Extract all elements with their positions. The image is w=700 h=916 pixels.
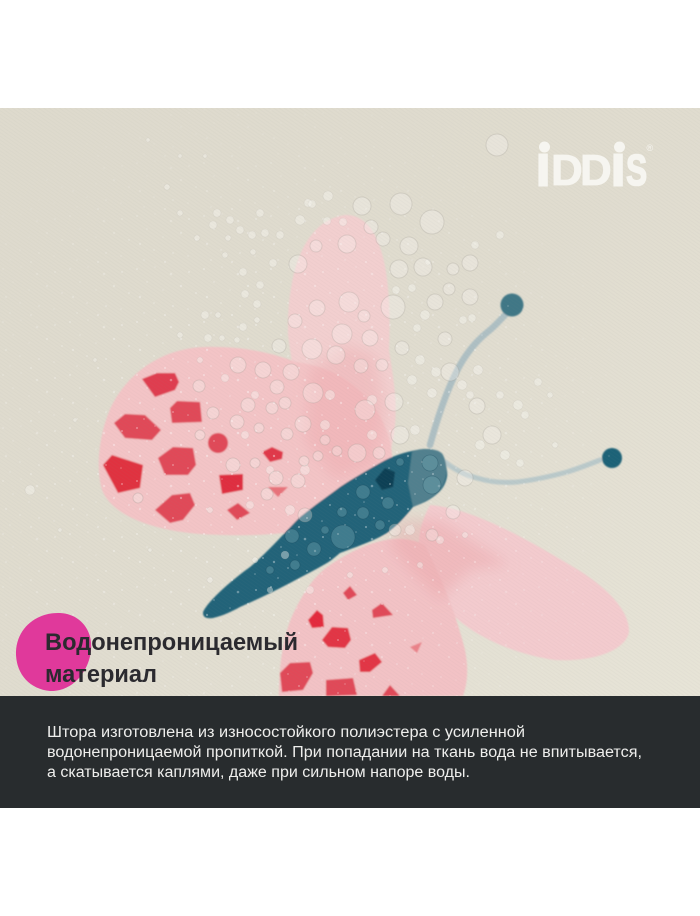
description text [47, 724, 642, 781]
fabric weave texture [0, 108, 700, 696]
large water droplets [133, 134, 508, 541]
body head shade [408, 449, 446, 507]
fabric background [0, 108, 700, 696]
pink blob [16, 613, 91, 691]
logo: IDDIS [537, 142, 654, 195]
antenna: upper [430, 313, 507, 445]
dark description panel [0, 696, 700, 808]
description text: а скатывается каплями, даже при сильном напоре воды. [47, 764, 470, 781]
logo: IDDIS: ® [646, 143, 654, 153]
heading text: Водонепроницаемый [45, 629, 298, 656]
antenna head: right [602, 448, 622, 468]
butterfly illustration [99, 215, 629, 696]
red wing spots [103, 373, 422, 696]
left wing [99, 347, 392, 535]
small water droplets [25, 138, 558, 594]
heading with pink blob [16, 613, 298, 691]
upper wing [288, 215, 396, 470]
antenna head: upper [500, 294, 524, 316]
antenna: right [445, 460, 600, 482]
heading with pink blob: материал [45, 661, 157, 688]
logo: IDDIS: I [612, 146, 624, 195]
bottom lower wing [279, 539, 467, 696]
right lower wing [419, 505, 629, 660]
upper wing darker wash [310, 348, 383, 473]
description text: водонепроницаемой пропиткой. При попадании на ткань вода не впитывается, [47, 744, 642, 761]
fine droplet speckle [2, 180, 610, 696]
description text: Штора изготовлена из износостойкого полиэстера с усиленной [47, 724, 525, 741]
body dark spot [375, 468, 395, 490]
photo: wet fabric with butterfly [0, 108, 700, 696]
droplets on the body [266, 455, 441, 574]
lower wing darker wash [390, 520, 510, 600]
logo: IDDIS: I [537, 146, 549, 195]
logo: IDDIS: D [551, 146, 583, 195]
logo: IDDIS: S [626, 146, 647, 195]
body [203, 449, 447, 618]
logo: IDDIS: D [580, 146, 612, 195]
